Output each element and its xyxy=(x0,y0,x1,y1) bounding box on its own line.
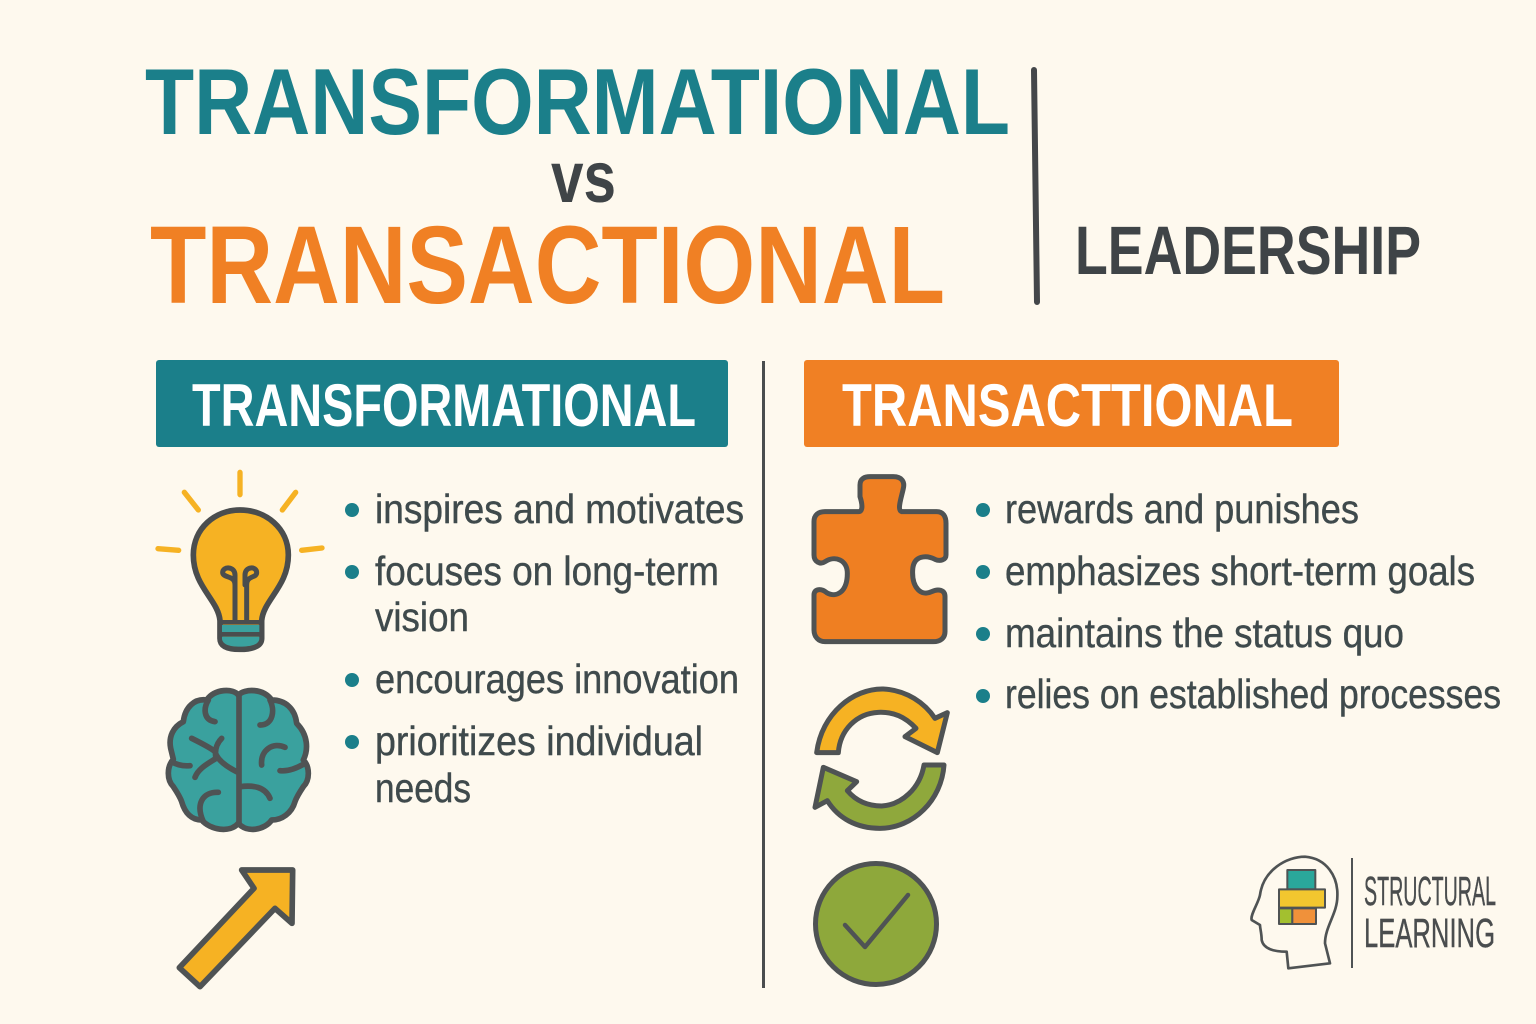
icon: arrow up-right xyxy=(179,870,293,987)
title divider xyxy=(1034,70,1037,302)
list: transformational traits: focuses on long-term xyxy=(375,548,719,594)
icon: puzzle piece xyxy=(814,477,946,642)
list: transactional traits xyxy=(976,486,1501,717)
title: leadership: LEADERSHIP xyxy=(1075,212,1421,289)
column divider xyxy=(762,361,765,988)
list: transformational traits: needs xyxy=(375,765,471,811)
title: transformational: TRANSFORMATIONAL xyxy=(145,49,1010,154)
title: transactional: TRANSACTIONAL xyxy=(150,204,945,327)
list: transformational traits: inspires and motivates xyxy=(375,486,744,532)
logo: structural learning xyxy=(1251,857,1496,968)
logo head icon xyxy=(1251,857,1337,968)
title: vs: vs xyxy=(551,138,616,218)
list: transactional traits: rewards and punishes xyxy=(1005,486,1359,532)
panel: transformational header xyxy=(156,360,728,447)
icon: check circle xyxy=(816,864,936,984)
list: transformational traits: encourages innovation xyxy=(375,656,739,702)
icon: light bulb xyxy=(158,472,322,649)
list: transformational traits: prioritizes individual xyxy=(375,718,703,764)
icon: cycle arrows xyxy=(815,689,947,828)
panel: transformational header: TRANSFORMATIONAL xyxy=(192,372,696,439)
list: transactional traits: emphasizes short-term goals xyxy=(1005,548,1475,594)
panel: transactional header: TRANSACTTIONAL xyxy=(842,372,1293,439)
list: transactional traits: maintains the status quo xyxy=(1005,610,1404,656)
panel: transactional header xyxy=(804,360,1339,447)
list: transformational traits: vision xyxy=(375,594,469,640)
icon: brain xyxy=(168,690,308,829)
list: transformational traits xyxy=(345,486,744,811)
